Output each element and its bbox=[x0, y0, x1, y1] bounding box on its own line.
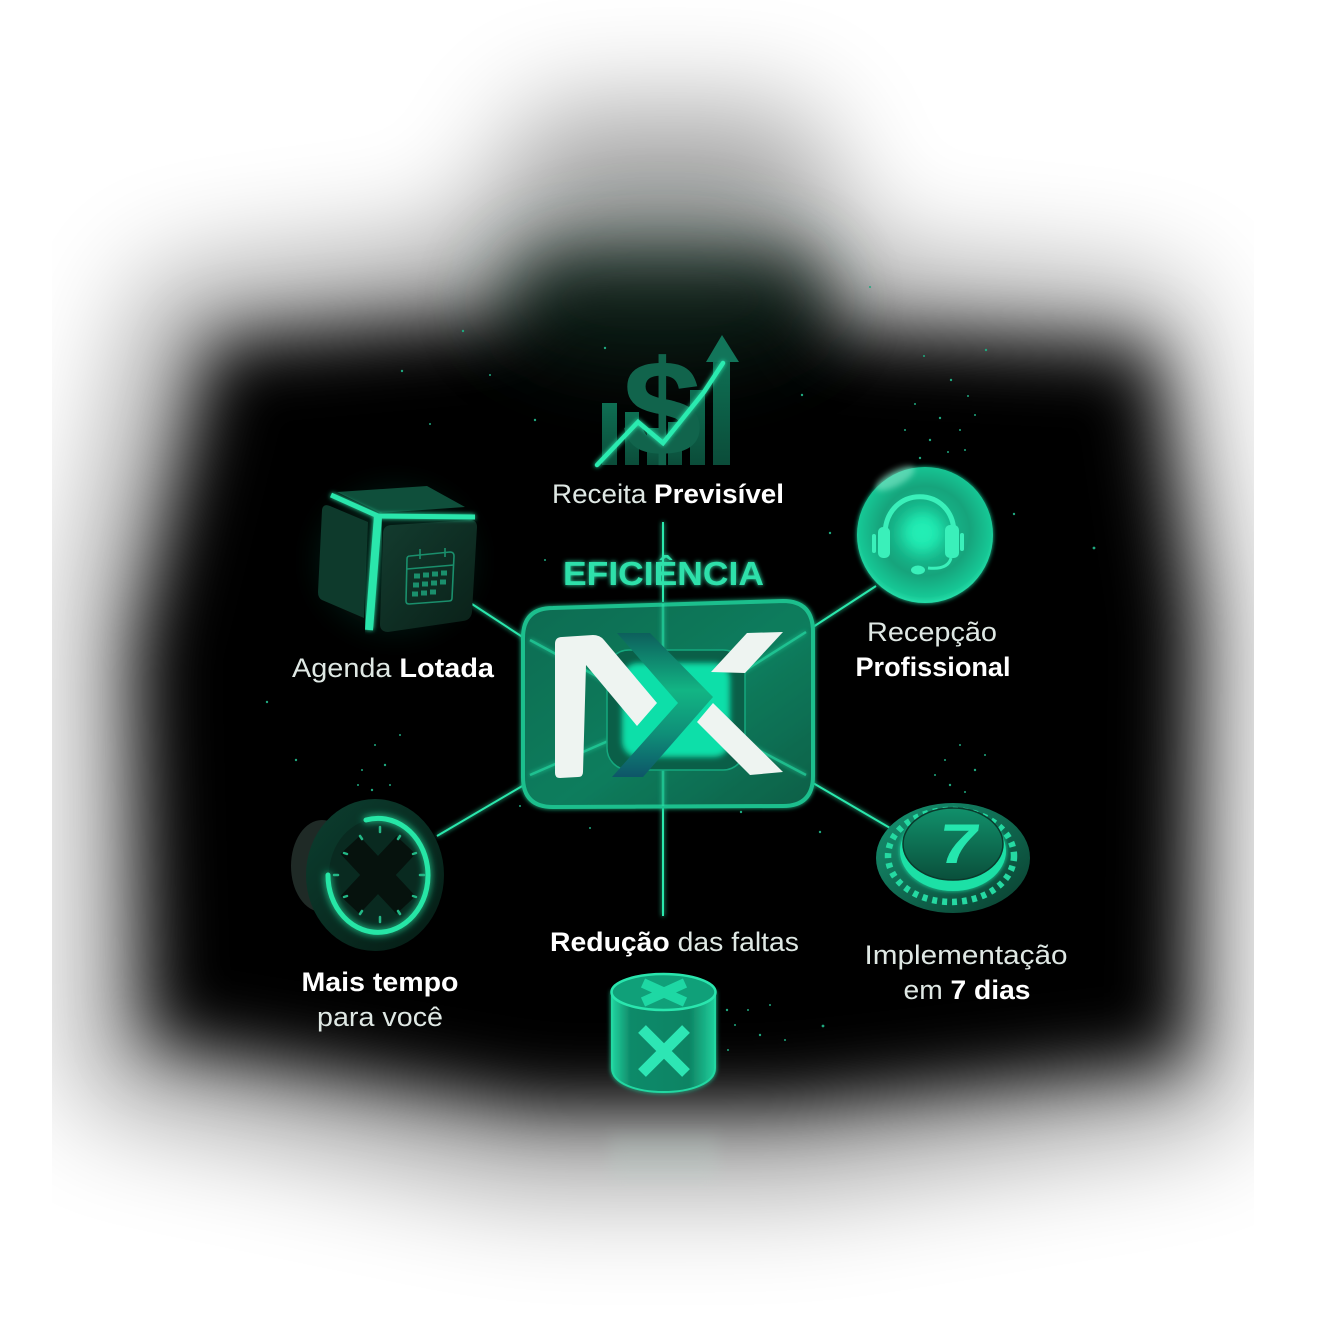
icon: clock bbox=[291, 799, 444, 951]
tick marks bbox=[334, 827, 424, 922]
cylinder body bbox=[612, 992, 715, 1092]
icon: calendar cube bbox=[318, 486, 477, 632]
sphere bbox=[857, 467, 993, 603]
label: Recepção Profissional bbox=[856, 617, 1010, 682]
logo N stroke bbox=[555, 635, 657, 778]
clock back cylinder bbox=[291, 820, 353, 912]
glass card bbox=[523, 601, 813, 807]
connector lines bbox=[437, 522, 890, 916]
title: EFICIÊNCIA: EFICIÊNCIA bbox=[563, 555, 764, 592]
button base bbox=[876, 803, 1030, 913]
button cap bbox=[903, 808, 1003, 880]
left face bbox=[318, 505, 368, 618]
front face bbox=[380, 520, 477, 632]
label: Redução das faltas: Redução das faltas bbox=[550, 927, 799, 957]
sphere highlight bbox=[872, 461, 918, 495]
label: Mais tempo para você: para você bbox=[317, 1002, 443, 1032]
icon: headset sphere bbox=[857, 461, 993, 603]
label: Mais tempo para você bbox=[302, 967, 458, 1032]
label: Receita Previsível: Receita Previsível bbox=[552, 479, 784, 509]
dark X on clock face bbox=[350, 845, 406, 905]
clock ring bbox=[328, 818, 428, 932]
label: Implementação em 7 dias: em 7 dias bbox=[904, 975, 1030, 1005]
clock hand bbox=[378, 840, 382, 876]
sphere core glow bbox=[902, 513, 942, 553]
logo X lower stroke bbox=[697, 703, 783, 775]
X on body bbox=[642, 1029, 686, 1073]
cylinder lid bbox=[612, 974, 716, 1010]
label: Recepção Profissional: Recepção bbox=[867, 617, 997, 647]
label: Mais tempo para você: Mais tempo bbox=[302, 967, 458, 997]
icon: cylinder with X bbox=[612, 974, 716, 1092]
icon: revenue chart with dollar sign and rising arrow bbox=[597, 332, 739, 484]
inner glowing square bbox=[607, 650, 745, 770]
cube soft glow bbox=[320, 490, 470, 630]
X on lid bbox=[643, 983, 685, 1002]
clock body bbox=[306, 799, 444, 951]
label: Agenda Lotada: Agenda Lotada bbox=[292, 653, 495, 683]
glowing under-ring bbox=[900, 811, 1006, 891]
label: Recepção Profissional: Profissional bbox=[856, 652, 1010, 682]
glowing edges bbox=[331, 495, 475, 517]
label: Implementação em 7 dias bbox=[864, 940, 1068, 1005]
label: Implementação em 7 dias: Implementação bbox=[864, 940, 1068, 970]
chart bars bbox=[602, 362, 730, 465]
dollar sign: $ bbox=[622, 332, 702, 484]
central panel: NX logo card bbox=[523, 601, 813, 807]
number 7: 7 bbox=[934, 812, 984, 875]
dashed light ring bbox=[888, 810, 1014, 902]
background: blurred black blob on white bbox=[80, 110, 1240, 1190]
top face bbox=[337, 486, 465, 513]
icon: button with number 7 bbox=[876, 803, 1030, 913]
rising trend line bbox=[597, 363, 723, 465]
arrow head bbox=[706, 335, 739, 362]
headset bbox=[872, 497, 964, 574]
logo X upper stroke bbox=[711, 632, 783, 673]
logo chevron bbox=[612, 633, 713, 777]
calendar glyph bbox=[406, 548, 454, 604]
